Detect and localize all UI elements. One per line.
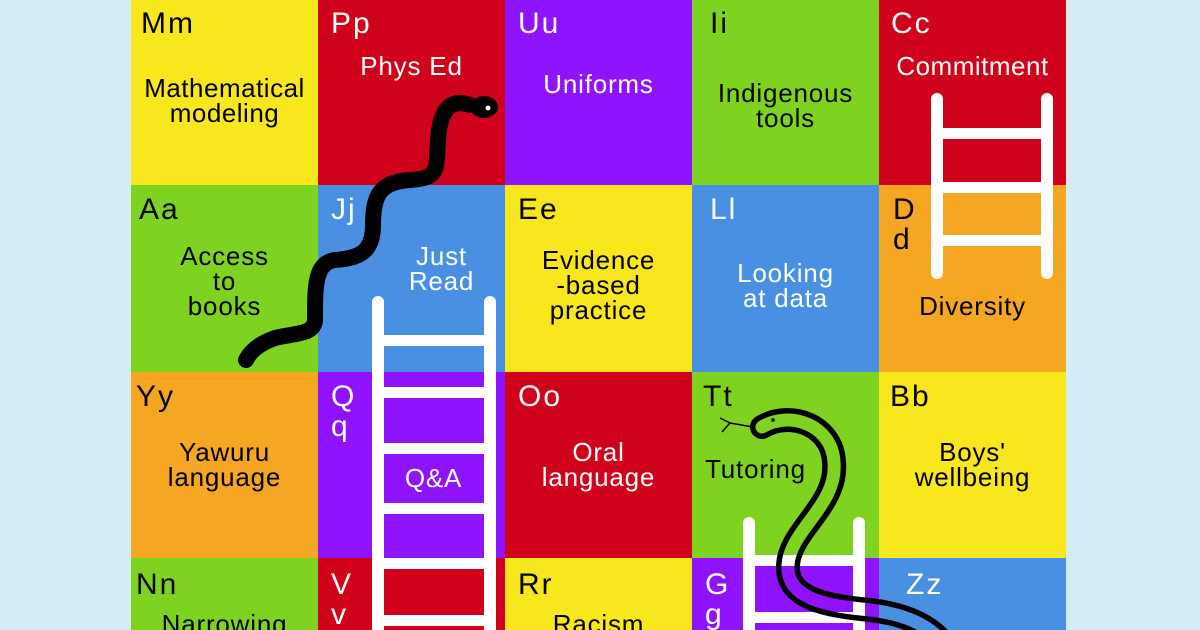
cell: Bb: Boys' (939, 437, 1006, 467)
cell: Ee: practice (550, 295, 647, 325)
cell: Qq (318, 372, 505, 559)
cell: Rr (505, 558, 692, 630)
cell: Ii (692, 0, 879, 187)
cell: Jj (318, 185, 505, 372)
cell: Vv (318, 558, 505, 630)
cell: Pp (318, 0, 505, 187)
cell: Aa: Aa (139, 193, 180, 226)
cell: Ee: Ee (518, 193, 559, 226)
cell: Ii: tools (756, 103, 815, 133)
cell: Ee (505, 185, 692, 372)
cell: Rr: Rr (518, 568, 554, 601)
cell: Qq: Q (331, 380, 356, 413)
cell: Bb: wellbeing (915, 462, 1030, 492)
ladder: Tt to Gg (743, 517, 865, 630)
cell: Oo: Oral (572, 437, 625, 467)
snake: Pp to Aa (246, 96, 498, 360)
cell: Jj: Jj (331, 193, 357, 226)
cell: Ll: Ll (710, 193, 737, 226)
cell: Tt (692, 372, 879, 559)
cell: Yy: Yy (136, 380, 175, 413)
cell: Oo: language (542, 462, 655, 492)
cell: Uu: Uniforms (543, 69, 654, 99)
cell: Dd (879, 185, 1066, 372)
cell: Ee: Evidence (542, 245, 655, 275)
cell: Uu (505, 0, 692, 187)
cell: Cc (879, 0, 1066, 187)
cell: Dd: d (893, 223, 912, 256)
cell: Qq: q (331, 410, 350, 443)
cell: Pp: Phys Ed (360, 51, 463, 81)
cell: Nn: Nn (136, 568, 178, 601)
cell: Bb: Bb (890, 380, 931, 413)
cell: Mm: Mathematical (144, 73, 305, 103)
cell: Cc: Cc (891, 7, 932, 40)
ladder: Jj to Vv (372, 296, 496, 630)
cell: Dd: Diversity (919, 291, 1026, 321)
cell: Oo (505, 372, 692, 559)
cell: Oo: Oo (518, 380, 562, 413)
cell: Ll (692, 185, 879, 372)
cell: Gg (692, 558, 879, 630)
cell: Tt: Tt (703, 380, 734, 413)
cell: Mm: Mm (141, 7, 195, 40)
cell: Vv: V (331, 568, 353, 601)
cell: Jj: Read (409, 266, 474, 296)
cell: Aa: books (188, 291, 261, 321)
cell: Aa (131, 185, 318, 372)
cell: Ee: -based (556, 270, 641, 300)
snake: Tt to Zz (720, 408, 948, 630)
cell: Zz (879, 558, 1066, 630)
cell: Dd: D (893, 193, 917, 226)
cell: Ii: Ii (710, 7, 729, 40)
ladder: Cc to Dd (931, 93, 1053, 279)
cell: Mm (131, 0, 318, 187)
cell: Ll: at data (743, 283, 828, 313)
cell: Uu: Uu (518, 7, 560, 40)
cell: Ii: Indigenous (718, 78, 853, 108)
cell: Zz: Zz (906, 568, 943, 601)
cell: Yy: Yawuru (179, 437, 270, 467)
cell: Gg: G (705, 568, 730, 601)
cell: Jj: Just (416, 241, 467, 271)
cell: Qq: Q&A (405, 463, 462, 493)
cell: Cc: Commitment (896, 51, 1049, 81)
cell: Mm: modeling (170, 98, 279, 128)
overlays: snakes and ladders (238, 93, 1053, 630)
cell: Bb (879, 372, 1066, 559)
cell: Ll: Looking (737, 258, 834, 288)
cell: Yy (131, 372, 318, 559)
cell: Aa: to (213, 266, 236, 296)
cell: Pp: Pp (331, 7, 372, 40)
cell: Tt: Tutoring (705, 454, 806, 484)
cell: Yy: language (168, 462, 281, 492)
cell: Nn (131, 558, 318, 630)
cell: Aa: Access (180, 241, 269, 271)
